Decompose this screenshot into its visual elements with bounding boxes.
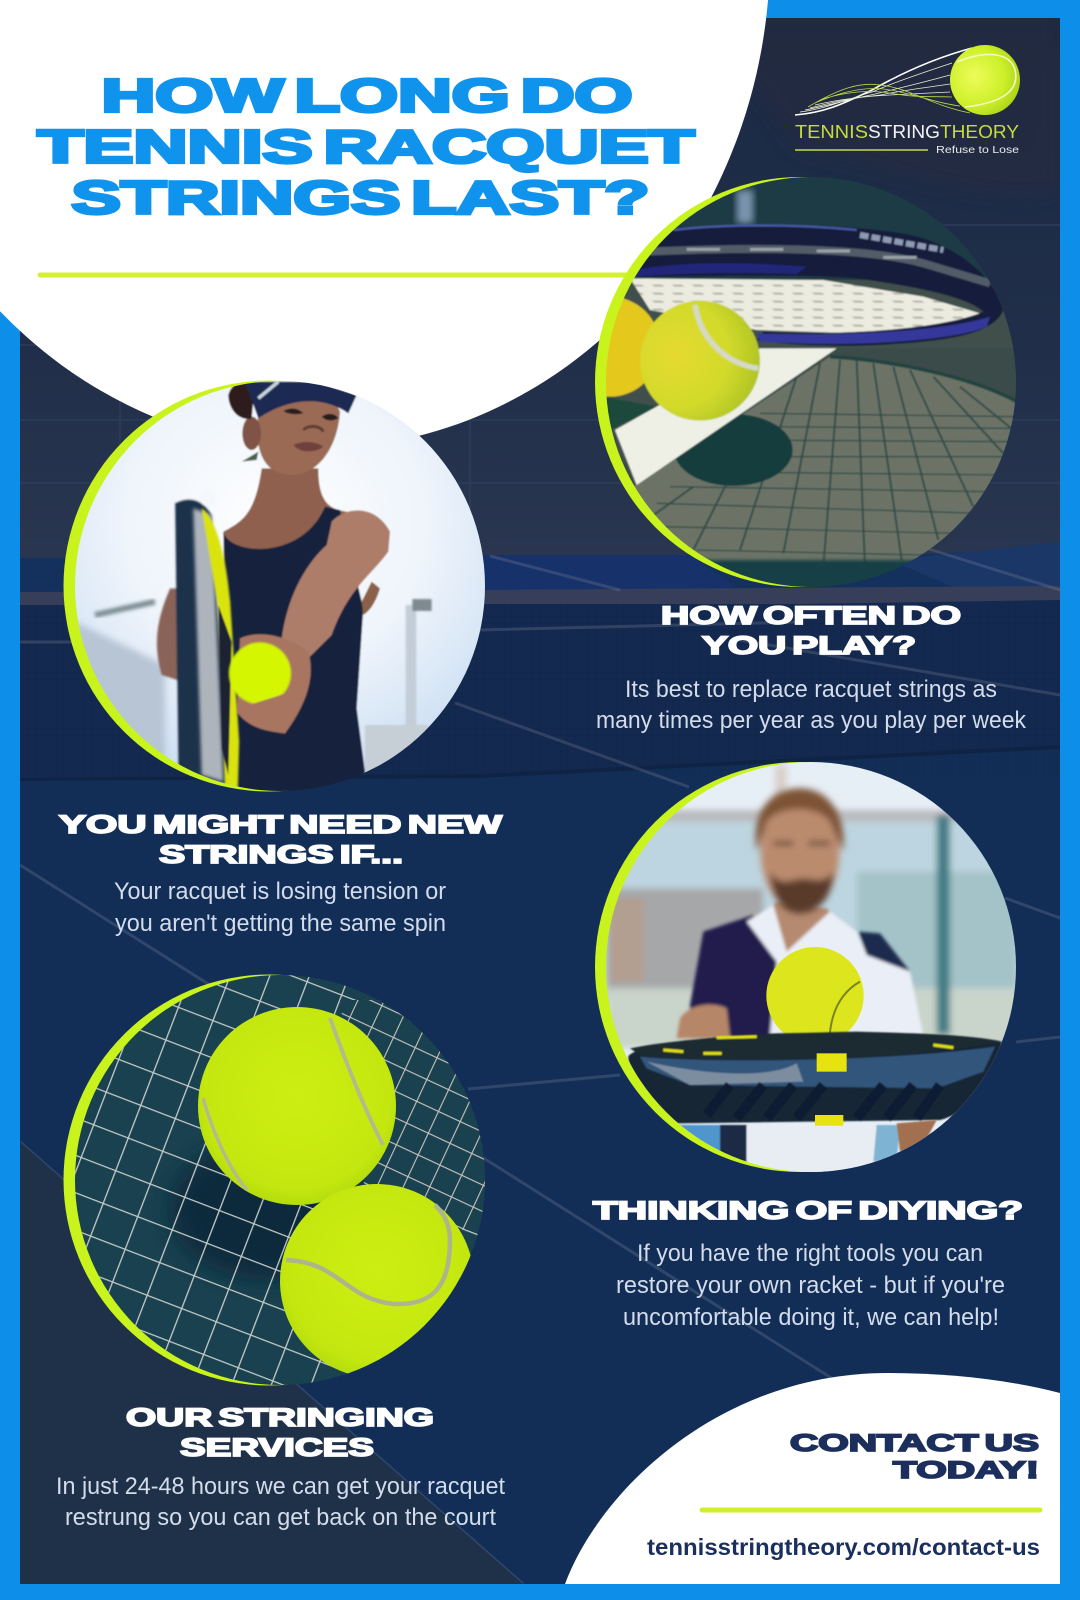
text block: thinking of diying: If you have the right tools you can	[637, 1240, 983, 1267]
ball one	[198, 1007, 396, 1205]
background building and lamp	[75, 622, 165, 768]
callout: contact us today: CONTACT US	[790, 1430, 1039, 1457]
text block: thinking of diying	[593, 1197, 1023, 1331]
ball shadow	[674, 414, 793, 486]
bottom right contact shape	[565, 1373, 1060, 1584]
text block: thinking of diying: THINKING OF DIYING?	[593, 1197, 1023, 1225]
back arm	[157, 588, 182, 682]
below racquet	[677, 1120, 937, 1176]
text block: thinking of diying: restore your own racket - but if you're	[616, 1272, 1005, 1299]
title: TENNIS RACQUET	[38, 120, 694, 172]
title underline	[40, 272, 640, 278]
text block: our stringing services	[56, 1404, 505, 1531]
torso	[222, 467, 348, 550]
text block: our stringing services: restrung so you can get back on the court	[65, 1504, 496, 1531]
text block: how often do you play: Its best to replace racquet strings as	[625, 676, 997, 703]
face	[256, 400, 341, 474]
icon: flying ball with strings	[795, 45, 1020, 115]
logo wordmark: THEORY	[940, 122, 1019, 142]
strings	[70, 970, 490, 1390]
photo panel: two tennis balls on strings	[64, 970, 490, 1390]
padel racquet	[628, 1032, 1002, 1123]
logo: Tennis String Theory: Refuse to Lose	[936, 144, 1019, 156]
ball	[766, 947, 864, 1044]
text block: our stringing services: In just 24-48 hours we can get your racquet	[56, 1473, 505, 1500]
logo wordmark: STRING	[868, 122, 940, 142]
court surface	[590, 348, 1030, 595]
text block: how often do you play: many times per year as you play per week	[596, 707, 1027, 734]
text block: our stringing services: OUR STRINGING	[126, 1404, 434, 1432]
blurred court background	[606, 762, 1016, 1172]
outstretched arm	[282, 510, 390, 662]
text block: our stringing services: SERVICES	[180, 1434, 374, 1462]
white court line	[615, 348, 837, 485]
photo panel: man balancing ball on racquet	[590, 755, 1030, 1180]
balls	[606, 298, 654, 398]
photo panel: racquet over balls on court	[595, 177, 1016, 587]
strings	[630, 278, 980, 333]
racquet	[175, 500, 228, 785]
logo: Tennis String Theory	[795, 45, 1020, 156]
text block: how often do you play: HOW OFTEN DO	[661, 602, 961, 630]
text block: you might need new strings	[59, 811, 503, 937]
hand and ball	[237, 634, 311, 733]
callout: contact us today: TODAY!	[893, 1457, 1039, 1484]
title: STRINGS LAST?	[72, 172, 650, 224]
callout: contact us today: tennisstringtheory.com/contact-us	[647, 1534, 1040, 1560]
text block: how often do you play: YOU PLAY?	[702, 632, 916, 660]
text block: you might need new strings: YOU MIGHT NEED NEW	[59, 811, 503, 839]
title: HOW LONG DO	[102, 70, 632, 122]
logo wordmark: TENNIS	[795, 122, 868, 142]
racquet frame	[623, 225, 1003, 346]
text block: you might need new strings: Your racquet is losing tension or	[114, 878, 446, 905]
ball two	[280, 1184, 474, 1378]
text block: you might need new strings: you aren't getting the same spin	[115, 910, 446, 937]
callout: contact us today	[647, 1430, 1040, 1560]
text block: you might need new strings: STRINGS IF...	[159, 841, 403, 869]
top white title shape	[0, 0, 770, 449]
shirt and arm	[677, 902, 923, 1038]
text block: thinking of diying: uncomfortable doing it, we can help!	[623, 1304, 999, 1331]
head	[756, 788, 844, 913]
text block: how often do you play	[596, 602, 1027, 734]
photo panel: woman holding racquet and ball	[55, 375, 495, 808]
title	[38, 70, 694, 224]
